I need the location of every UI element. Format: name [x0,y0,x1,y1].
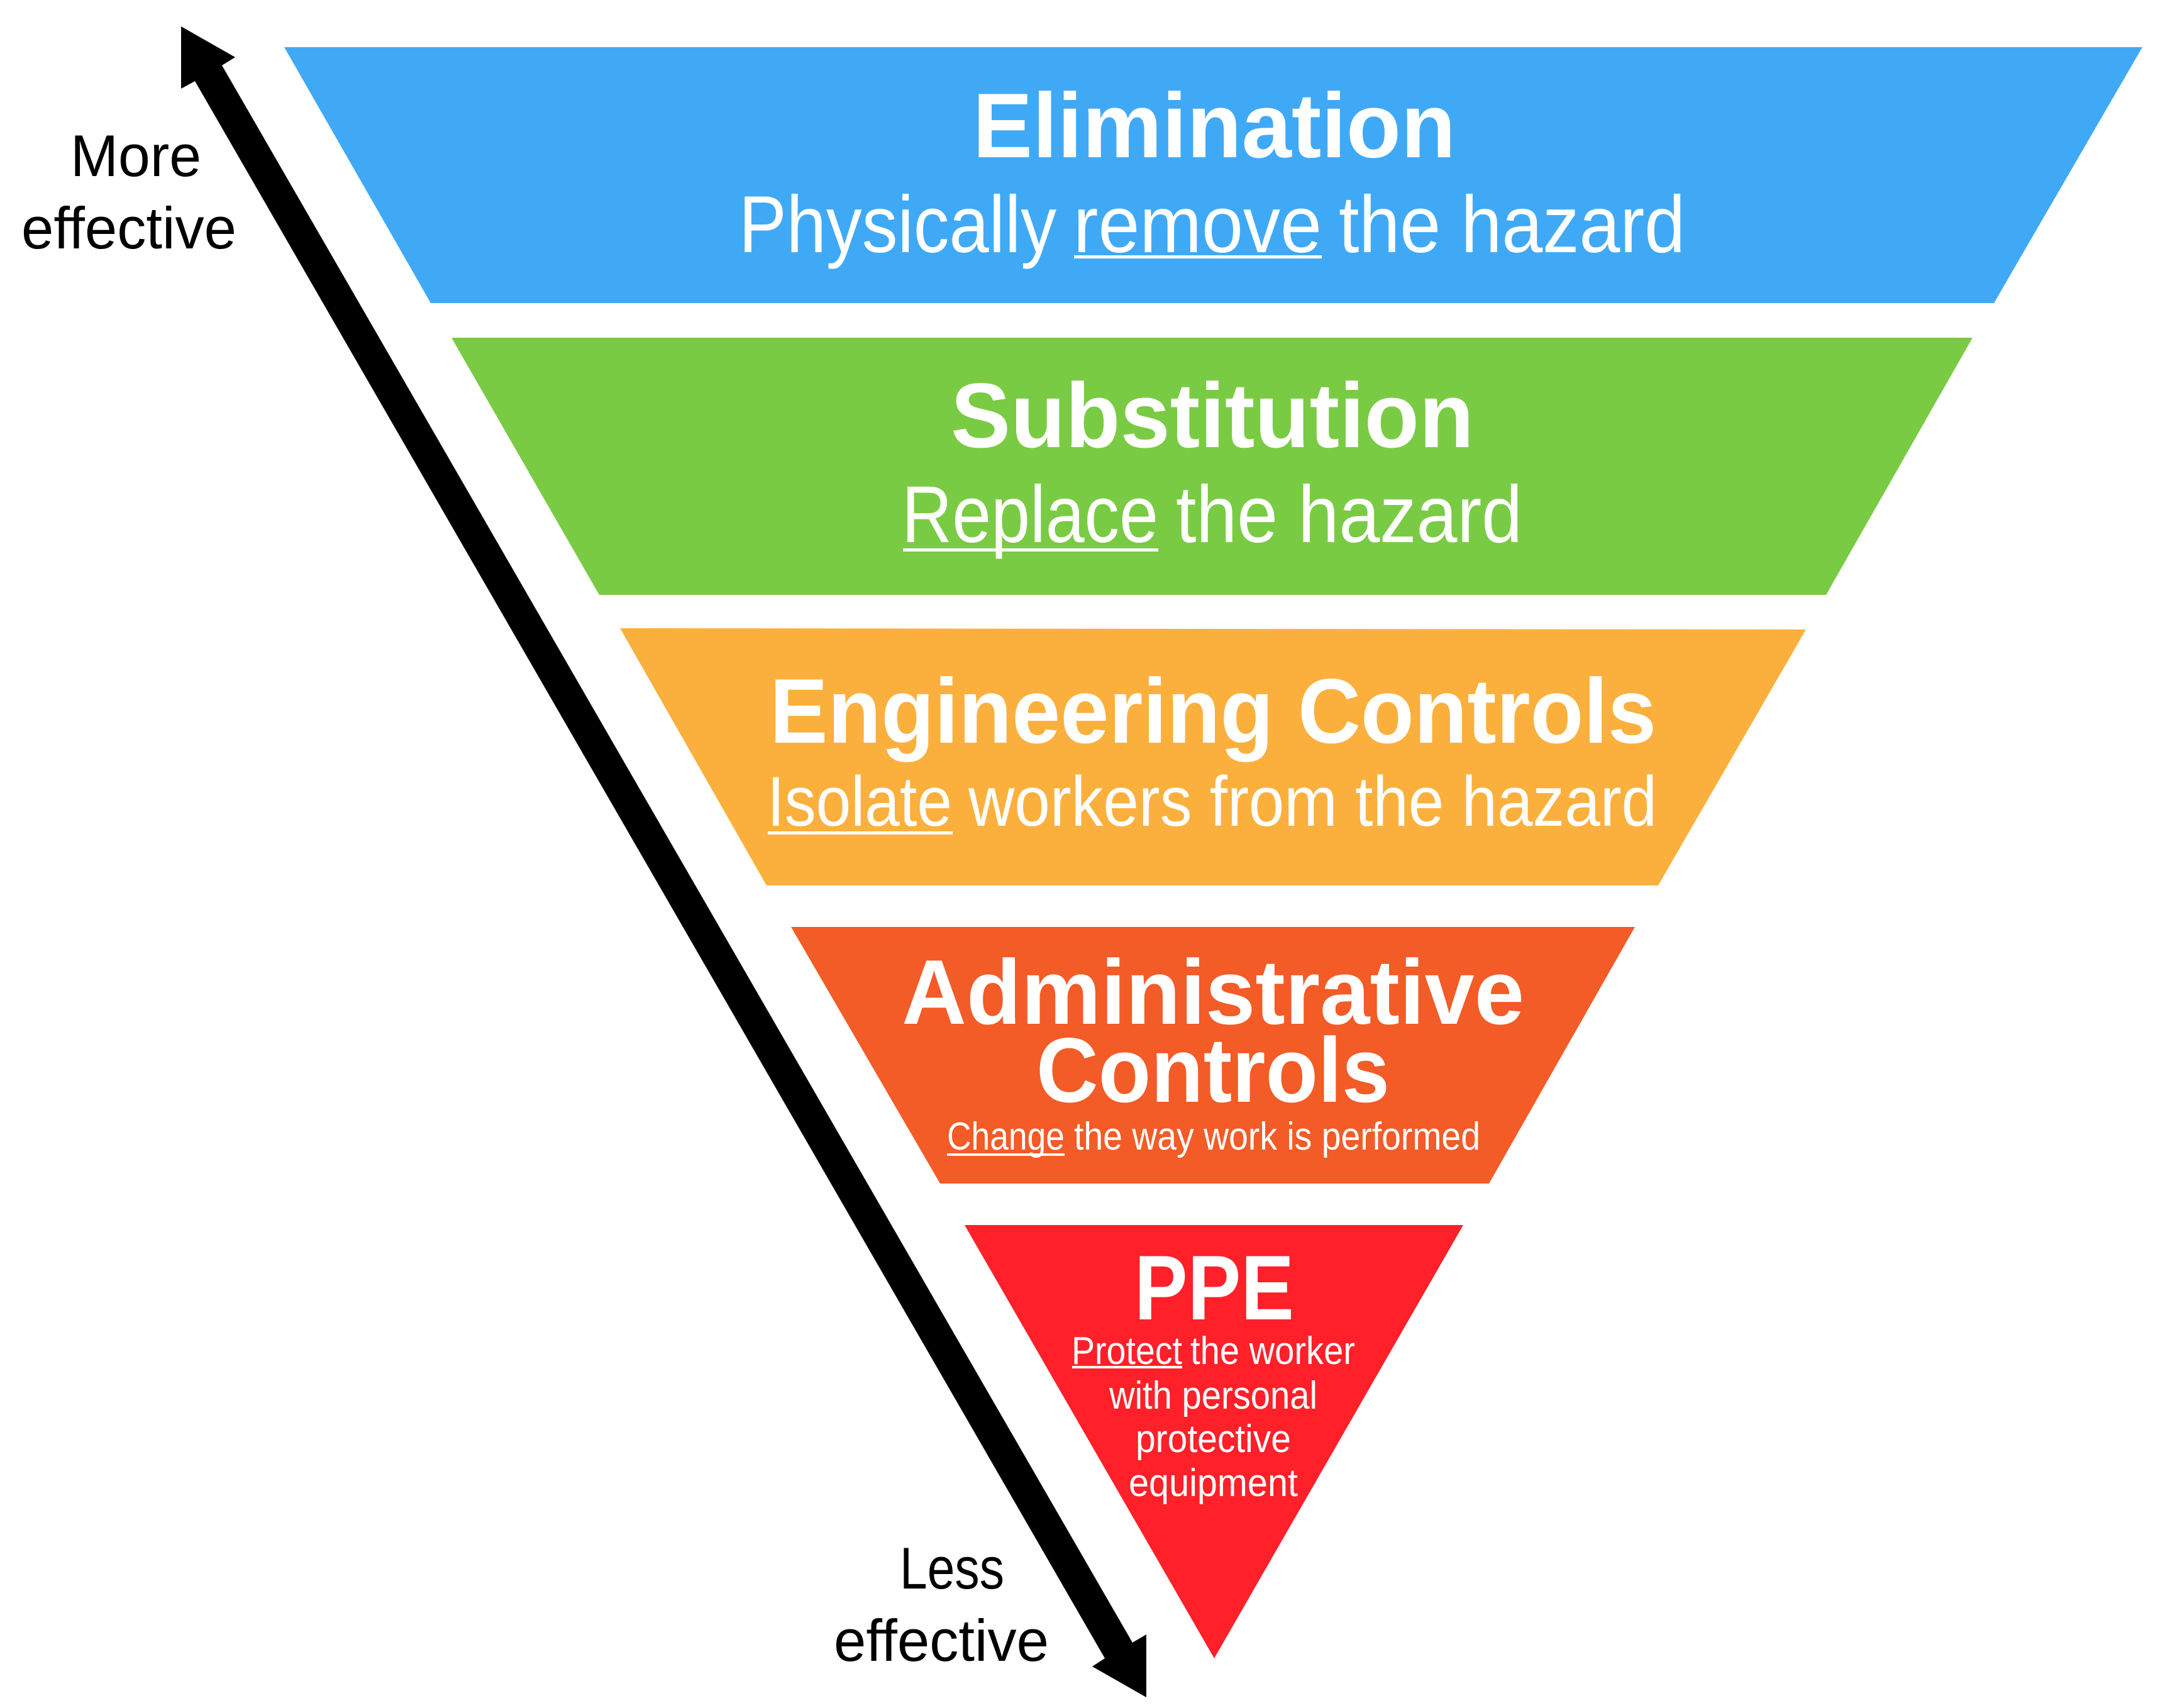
band: administrative controls [791,927,1635,1184]
description: PPE: equipment [1129,1461,1298,1505]
label: less effective: Less [900,1535,1004,1601]
description: PPE: with personal [1109,1374,1317,1417]
description: substitution: Replace [902,470,1158,560]
heading: administrative controls: Controls [1036,1019,1390,1121]
heading: elimination: Elimination [973,74,1456,177]
label: less effective [834,1535,1049,1673]
label: less effective: effective [834,1607,1049,1673]
description: PPE: Protect [1071,1329,1182,1373]
description: engineering controls: Isolate [767,762,952,841]
description: elimination [739,180,1685,270]
band: elimination [284,47,2142,303]
heading: PPE: PPE [1134,1236,1294,1339]
description: engineering controls: workers from the hazard [968,762,1657,841]
panel: elimination [284,47,2142,303]
description: administrative controls [947,1115,1480,1158]
panel: engineering controls [620,628,1806,885]
heading: administrative controls: Administrative [902,941,1524,1043]
description: substitution: the hazard [1176,470,1522,560]
description: PPE [1071,1329,1355,1505]
heading: administrative controls [902,941,1524,1121]
heading: substitution: Substitution [951,364,1474,467]
label: more effective: effective [21,195,236,261]
panel: PPE [965,1225,1463,1658]
description: substitution [902,470,1522,560]
description: elimination: remove [1073,180,1322,270]
label: more effective [21,123,236,261]
band: engineering controls [620,628,1806,885]
description: administrative controls: Change [947,1115,1065,1158]
description: PPE: protective [1136,1417,1291,1461]
label: more effective: More [70,123,201,189]
description: administrative controls: the way work is performed [1074,1115,1480,1158]
band: PPE [965,1225,1463,1658]
panel: administrative controls [791,927,1635,1184]
band: substitution [451,338,1973,595]
arrow: effectiveness double-headed [181,26,1146,1697]
panel: substitution [451,338,1973,595]
description: elimination: the hazard [1339,180,1685,270]
description: elimination: Physically [739,180,1056,270]
heading: engineering controls: Engineering Controls [770,660,1656,762]
description: PPE: the worker [1190,1329,1355,1373]
